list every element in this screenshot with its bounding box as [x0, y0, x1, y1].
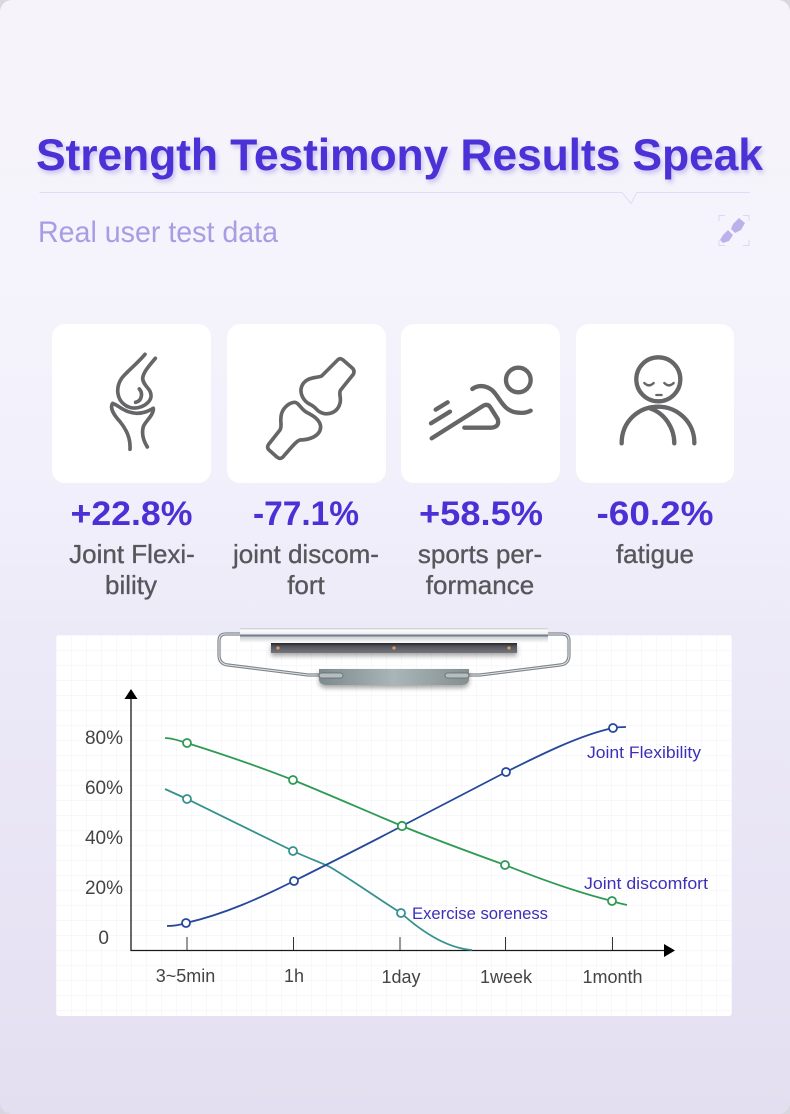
- x axis labels: 3~5min: [156, 966, 215, 986]
- subtitle: Real user test data: [38, 216, 278, 249]
- card: [227, 324, 386, 483]
- line: exercise soreness: [165, 789, 472, 950]
- series label: joint flexibility: Joint Flexibility: [587, 743, 702, 762]
- line: joint discomfort: [165, 738, 627, 905]
- card: [401, 324, 560, 483]
- x axis labels: 1day: [381, 967, 421, 987]
- x axis labels: 1h: [284, 966, 304, 986]
- card: [576, 324, 734, 483]
- value: +22.8%: [70, 495, 192, 533]
- chart axes: [124, 689, 675, 957]
- y axis labels: 40%: [85, 828, 123, 849]
- y axis labels: 20%: [85, 878, 123, 899]
- icon: small joint badge: [719, 216, 749, 246]
- paper: [56, 635, 732, 1016]
- panel: fatigue: [576, 324, 734, 569]
- panel: joint flexibility: [52, 324, 211, 600]
- y axis labels: 60%: [85, 778, 123, 799]
- panel: joint discomfort: [227, 324, 386, 600]
- panel: clipboard chart: [56, 628, 732, 1016]
- y axis labels: 0: [98, 928, 109, 949]
- x axis labels: [156, 966, 643, 987]
- label: formance: [426, 570, 534, 600]
- value: +58.5%: [419, 495, 543, 533]
- series label: exercise soreness: Exercise soreness: [412, 904, 548, 923]
- card: [52, 324, 211, 483]
- label: fort: [287, 570, 326, 600]
- title divider with notch: [40, 192, 750, 204]
- value: -77.1%: [253, 495, 359, 533]
- icon: tired person: [622, 357, 694, 443]
- label: Joint Flexi-: [69, 539, 195, 569]
- panel: sports performance: [401, 324, 560, 600]
- value: -60.2%: [596, 495, 714, 533]
- line: joint flexibility: [167, 724, 626, 927]
- icon: runner: [431, 368, 531, 438]
- series label: joint discomfort: Joint discomfort: [584, 874, 708, 893]
- y axis labels: [85, 728, 123, 949]
- x axis labels: 1week: [480, 967, 533, 987]
- x axis labels: 1month: [582, 967, 643, 987]
- icon: joint bones: [268, 359, 354, 458]
- label: fatigue: [616, 539, 694, 569]
- y axis labels: 80%: [85, 728, 123, 749]
- clipboard clip: [219, 628, 569, 685]
- icon: knee: [112, 354, 155, 449]
- label: joint discom-: [232, 539, 379, 569]
- label: sports per-: [418, 539, 542, 569]
- label: bility: [105, 570, 157, 600]
- title: Strength Testimony Results Speak: [36, 131, 763, 180]
